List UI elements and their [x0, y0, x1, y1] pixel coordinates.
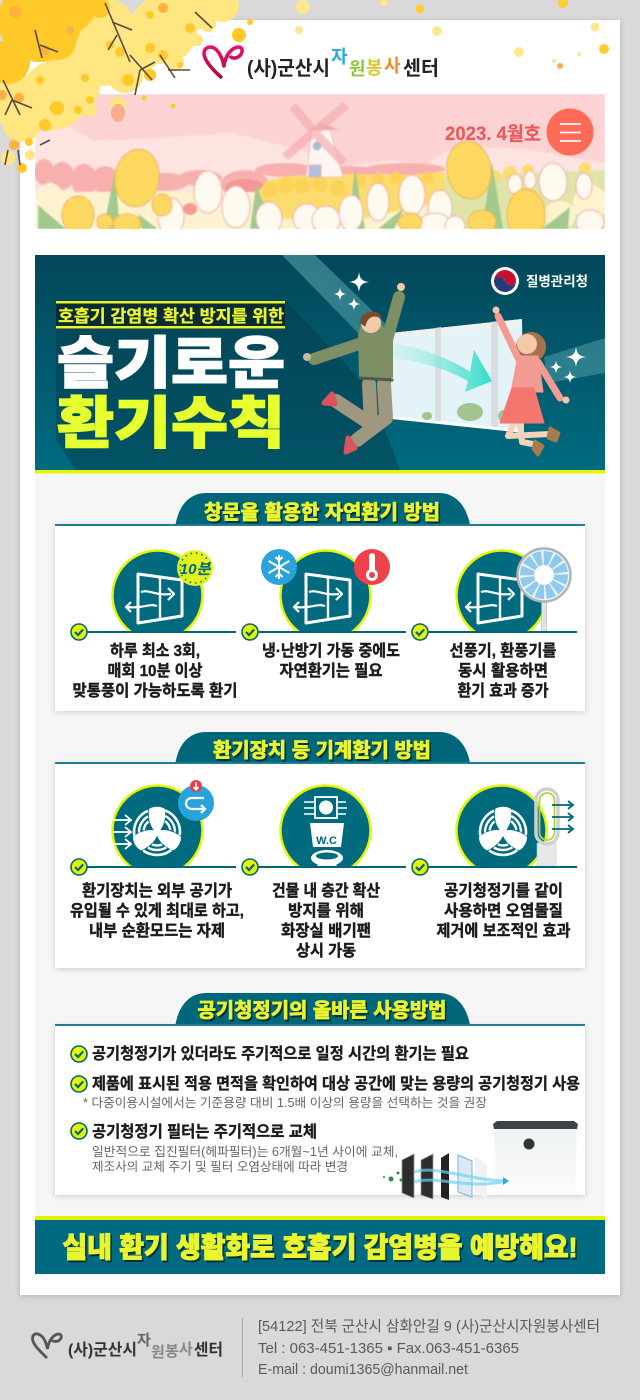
right green field: [445, 170, 605, 229]
item text 1: 환기장치는 외부 공기가: [82, 882, 232, 900]
footer logo text: 센터: [194, 1341, 223, 1359]
poster title: 환기수칙: [57, 392, 285, 455]
icon: toilet exhaust fan: W.C: [316, 835, 337, 847]
rule 3: [71, 1123, 398, 1174]
item text 2: 냉·난방기 가동 중에도: [262, 642, 400, 660]
logo text: 봉: [366, 58, 383, 78]
poster subtitle band: 호흡기 감염병 확산 방지를 위한: [58, 307, 284, 326]
section card: [55, 763, 585, 968]
sky: [68, 94, 605, 166]
rule 2: * 다중이용시설에서는 기준용량 대비 1.5배 이상의 용량을 선택하는 것을 권장: [83, 1096, 488, 1110]
item text 2: 상시 가동: [296, 942, 356, 960]
poster title: 슬기로운: [57, 332, 285, 395]
icon: toilet exhaust fan: [280, 786, 370, 876]
logo: 질병관리청: 질병관리청: [526, 274, 588, 289]
white tulips: [158, 163, 604, 236]
footer contact text: Tel : 063-451-1365 ▪ Fax.063-451-6365: [258, 1340, 519, 1357]
item text 2: 자연환기는 필요: [280, 662, 383, 680]
divider lines and checks: [71, 859, 577, 875]
item text 1: 맞통풍이 가능하도록 환기: [72, 682, 238, 700]
item text 3: 환기 효과 증가: [458, 682, 549, 700]
pale base field: [35, 191, 428, 229]
logo text: 자: [331, 47, 348, 67]
yellow centre field: [256, 172, 450, 222]
footer logo text: 사: [179, 1341, 193, 1358]
poster bottom line: [35, 470, 605, 474]
rule 2: 제품에 표시된 적용 면적을 확인하여 대상 공간에 맞는 용량의 공기청정기 사용: [92, 1075, 580, 1093]
icon: window 10 minutes: 10분: [180, 561, 211, 578]
item text 1: [72, 642, 238, 700]
icon: window with snow and heat: [261, 549, 390, 631]
green leaves: [38, 162, 570, 229]
footer contact text: E-mail : doumi1365@hanmail.net: [258, 1361, 469, 1378]
icon: window 10 minutes: [112, 550, 213, 640]
panel: 공기청정기 사용방법: [55, 993, 585, 1200]
air purifier illustration: [383, 1121, 578, 1200]
icon: ventilator with recirculation: [112, 780, 214, 876]
divider lines and checks: [71, 624, 577, 640]
footer logo text: (사)군산시: [68, 1341, 137, 1359]
icon: grey heart: [32, 1334, 61, 1358]
icon: heart logo: [204, 47, 242, 78]
item text 2: 방지를 위해: [288, 902, 364, 920]
section heading: 창문을 활용한 자연환기 방법: [204, 501, 440, 524]
character: woman jumping: [492, 306, 570, 455]
item text 3: [450, 642, 557, 700]
windmill: [285, 105, 346, 177]
character: man jumping: [303, 283, 405, 452]
issue date: 2023. 4월호: 2023. 4월호: [445, 123, 541, 145]
section heading: 공기청정기의 올바른 사용방법: [198, 999, 446, 1022]
light petal over banner: [111, 104, 125, 122]
panel: 기계환기: [55, 732, 585, 968]
arrow: [391, 343, 492, 392]
sparkles: [334, 272, 586, 384]
logo text: [247, 47, 439, 80]
item text 3: 공기청정기를 같이: [444, 882, 563, 900]
item text 3: 선풍기, 환풍기를: [450, 642, 557, 660]
item text 1: 하루 최소 3회,: [110, 642, 200, 660]
rule 3: 제조사의 교체 주기 및 필터 오염상태에 따라 변경: [92, 1160, 348, 1174]
section tab: [176, 732, 470, 763]
item text 1: 유입될 수 있게 최대로 하고,: [70, 902, 244, 920]
footer logo text: 자: [137, 1332, 151, 1349]
item text 3: 제거에 보조적인 효과: [436, 922, 571, 940]
yellow tulips: [60, 140, 546, 229]
title shadow: [56, 300, 400, 470]
pink tulip row: [35, 158, 446, 192]
forsythia branch decoration: [0, 0, 253, 173]
bottom banner: 실내 환기 생활화로 호흡기 감염병을 예방해요!: [62, 1232, 578, 1263]
logo: 군산시자원봉사센터: [204, 47, 439, 80]
item text 2: 화장실 배기팬: [281, 922, 371, 940]
footer divider: [242, 1318, 243, 1377]
section card: [55, 1025, 585, 1195]
logo text: 사: [384, 56, 401, 76]
panel: 자연환기: [55, 493, 585, 711]
footer logo: [32, 1332, 223, 1361]
footer logo text: 봉: [165, 1343, 179, 1360]
rule 2: [71, 1075, 580, 1110]
panel: content background: [35, 470, 605, 1220]
icon: ventilator with air purifier: [456, 786, 573, 876]
logo: 질병관리청: [491, 267, 588, 295]
section card: [55, 525, 585, 711]
footer logo text: 원: [151, 1344, 165, 1361]
poster title: [57, 332, 285, 455]
bottom banner: [35, 1216, 605, 1274]
hills: [35, 126, 605, 192]
rule 1: 공기청정기가 있더라도 주기적으로 일정 시간의 환기는 필요: [92, 1045, 469, 1063]
section tab: [176, 993, 470, 1025]
poster background: [35, 255, 605, 470]
footer contact text: [54122] 전북 군산시 삼화안길 9 (사)군산시자원봉사센터: [258, 1318, 600, 1335]
light beam right: [544, 338, 605, 383]
item text 2: 건물 내 층간 확산: [272, 882, 380, 900]
logo text: 센터: [403, 57, 439, 80]
window: [391, 319, 524, 433]
logo text: 원: [349, 59, 366, 79]
item text 2: [272, 882, 380, 960]
hero banner: tulip field with windmill: [34, 94, 607, 241]
item text 3: [436, 882, 571, 940]
footer contact text: [258, 1318, 600, 1378]
item text 3: 사용하면 오염물질: [444, 902, 563, 920]
rule 3: 일반적으로 집진필터(헤파필터)는 6개월~1년 사이에 교체,: [92, 1145, 398, 1159]
poster header: 슬기로운 환기수칙: [35, 255, 605, 474]
light beam left: [282, 255, 386, 334]
item text 1: 매회 10분 이상: [108, 662, 203, 680]
scattered yellow petals: [295, 0, 609, 69]
icon: window with fan: [456, 548, 570, 640]
item text 3: 동시 활용하면: [458, 662, 548, 680]
rule 3: 공기청정기 필터는 주기적으로 교체: [92, 1123, 317, 1141]
icon: hamburger menu button: [546, 108, 594, 156]
item text 1: [70, 882, 244, 940]
item text 2: [262, 642, 400, 680]
footer logo text: [68, 1332, 223, 1361]
poster subtitle band: [56, 301, 285, 329]
section heading: 환기장치 등 기계환기 방법: [213, 739, 431, 762]
section tab: [176, 493, 470, 525]
item text 1: 내부 순환모드는 자제: [89, 922, 225, 940]
logo text: (사)군산시: [247, 57, 330, 80]
